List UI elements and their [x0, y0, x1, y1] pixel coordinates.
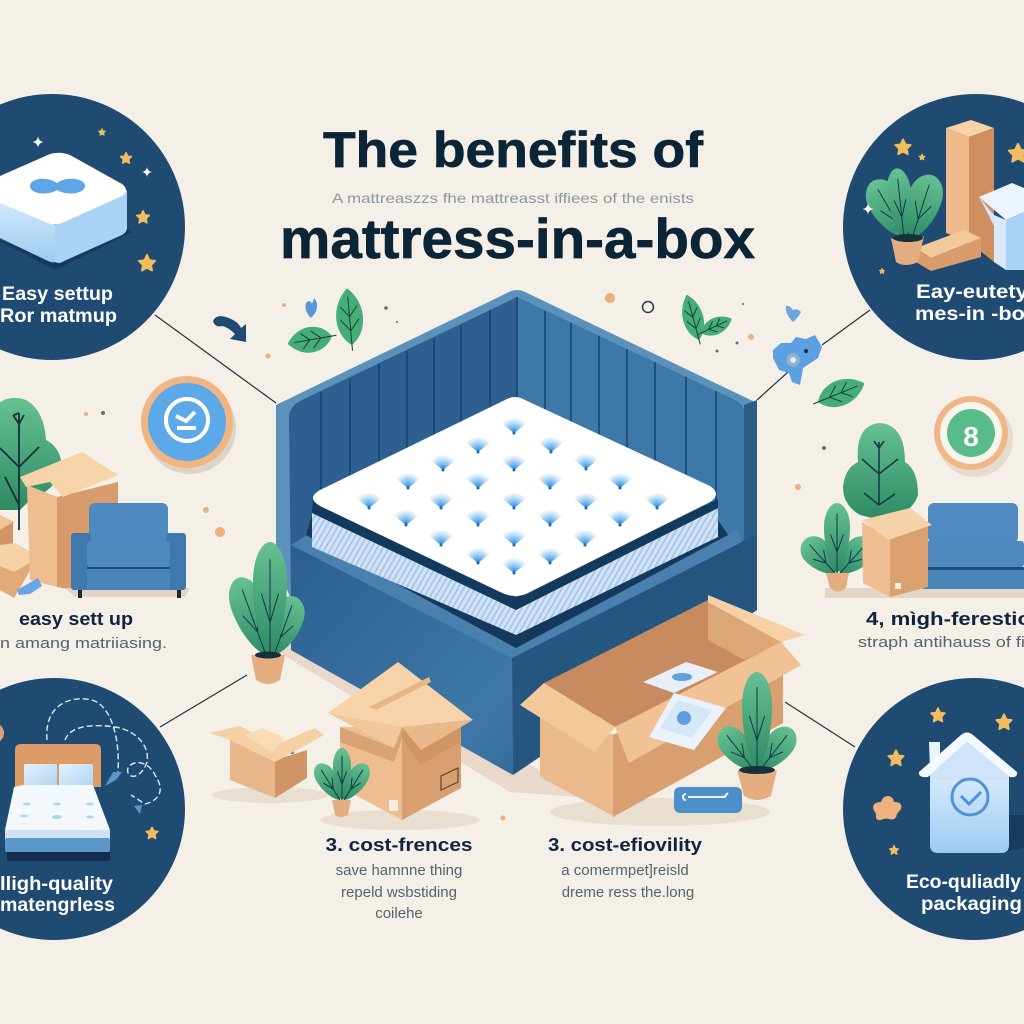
- big open box: [520, 595, 805, 817]
- hearts: [305, 298, 317, 318]
- floor shadow: [275, 640, 620, 800]
- mattress top: [313, 397, 716, 596]
- bed base: [291, 530, 757, 775]
- stars: [873, 708, 1012, 854]
- tree: [0, 398, 62, 530]
- small potted plant: [309, 748, 375, 817]
- benefit label: [0, 609, 167, 652]
- circle label: lligh-quality: [0, 874, 113, 895]
- title: [280, 122, 755, 270]
- subtitle: A mattreaszzs fhe mattreasst iffiees of the enists: [332, 190, 694, 206]
- circle label: [0, 284, 117, 327]
- front potted plant: [711, 672, 803, 800]
- benefit text: cost-frences: coilehe: [375, 905, 423, 922]
- benefit label: easy sett up: [19, 609, 133, 629]
- circle label: Eco-quliadly: [906, 872, 1021, 893]
- paper booklet: [649, 693, 726, 750]
- circle label: Easy settup: [2, 284, 113, 305]
- benefit text: cost-efficiency: [548, 835, 702, 901]
- tufts: [356, 418, 670, 574]
- icon: blue gear: [773, 335, 822, 385]
- star: [146, 827, 158, 839]
- central bed illustration: [275, 290, 757, 800]
- circle label: [0, 874, 115, 916]
- floor shadow: [65, 588, 190, 597]
- icon: house: [919, 732, 1024, 853]
- benefit text: cost-frences: 3. cost-frences: [326, 835, 472, 855]
- icon: foam block: [979, 183, 1024, 270]
- small plant: [794, 503, 881, 592]
- circle label: [915, 282, 1024, 325]
- circle panel: top right, mattress in a box: [843, 94, 1024, 360]
- title: mattress-in-a-box: [280, 207, 755, 270]
- tree: [843, 423, 918, 520]
- leaves: [285, 287, 869, 416]
- badge: 8: [963, 421, 979, 452]
- circle label: packaging: [921, 894, 1022, 915]
- icon: dashed arrows: [47, 699, 160, 814]
- circle label: Ror matmup: [0, 306, 117, 327]
- box: [862, 508, 932, 597]
- circle panel: top left, easy setup: [0, 94, 185, 360]
- dots: [203, 293, 801, 820]
- benefit text: cost-efficiency: dreme ress the.long: [562, 884, 694, 901]
- box: [20, 452, 118, 590]
- stars: [862, 139, 1024, 274]
- benefit label: 4, mìgh-ferestio: [866, 609, 1024, 629]
- badge: [934, 396, 1013, 477]
- icon: foam mattress: [0, 153, 132, 270]
- title: The benefits of: [323, 122, 703, 178]
- floating decorations around bed: [101, 287, 869, 821]
- ring: [642, 302, 654, 312]
- benefit text: cost-frences: save hamnne thing: [336, 862, 462, 879]
- small open box: [210, 726, 324, 798]
- benefit text: cost-frences: repeld wsbstiding: [341, 884, 457, 901]
- benefit label: n amang matriiasing.: [0, 635, 167, 652]
- stars: [32, 128, 155, 271]
- papers: [643, 662, 718, 693]
- blue packets: [17, 578, 42, 595]
- icon: orange badge edge: [0, 723, 4, 743]
- icon: tall box: [946, 120, 994, 262]
- icon: bed: [5, 744, 110, 861]
- circle label: matengrless: [0, 895, 115, 916]
- floor shadows under boxes: [212, 787, 770, 830]
- right scene: benefit high-freshness: [794, 396, 1024, 651]
- circle panel: bottom left, high-quality materials: [0, 678, 185, 940]
- benefit text: cost-efficiency: a comermpet]reisld: [561, 862, 689, 879]
- floor shadow: [825, 588, 1024, 598]
- circle panel: bottom right, eco-friendly packaging: [843, 678, 1024, 940]
- circle label: Eay-eutety: [916, 282, 1024, 303]
- flaps: [708, 595, 805, 642]
- circle label: mes-in -box: [915, 304, 1024, 325]
- left scene: benefit easy set up: [0, 376, 236, 652]
- benefit text: cost-efficiency: 3. cost-efiovility: [548, 835, 702, 855]
- badge: [141, 376, 236, 474]
- closed box: [328, 662, 473, 820]
- armchair: [71, 503, 186, 598]
- headboard: [276, 290, 757, 775]
- mattress: [306, 397, 728, 648]
- icon: flat box: [916, 230, 981, 271]
- benefit text: cost-frences: [326, 835, 472, 922]
- dots: [84, 412, 88, 416]
- blue tag: [674, 787, 742, 813]
- icon: curved arrow: [213, 316, 246, 342]
- large potted plant: [222, 542, 310, 684]
- sofa: [923, 503, 1024, 589]
- benefit label: straph antihauss of fit: [858, 634, 1024, 651]
- icon: potted plant: [858, 167, 949, 265]
- benefit label: [858, 609, 1024, 651]
- connector lines: [155, 310, 870, 747]
- left boxes: [0, 515, 38, 598]
- circle label: [906, 872, 1022, 915]
